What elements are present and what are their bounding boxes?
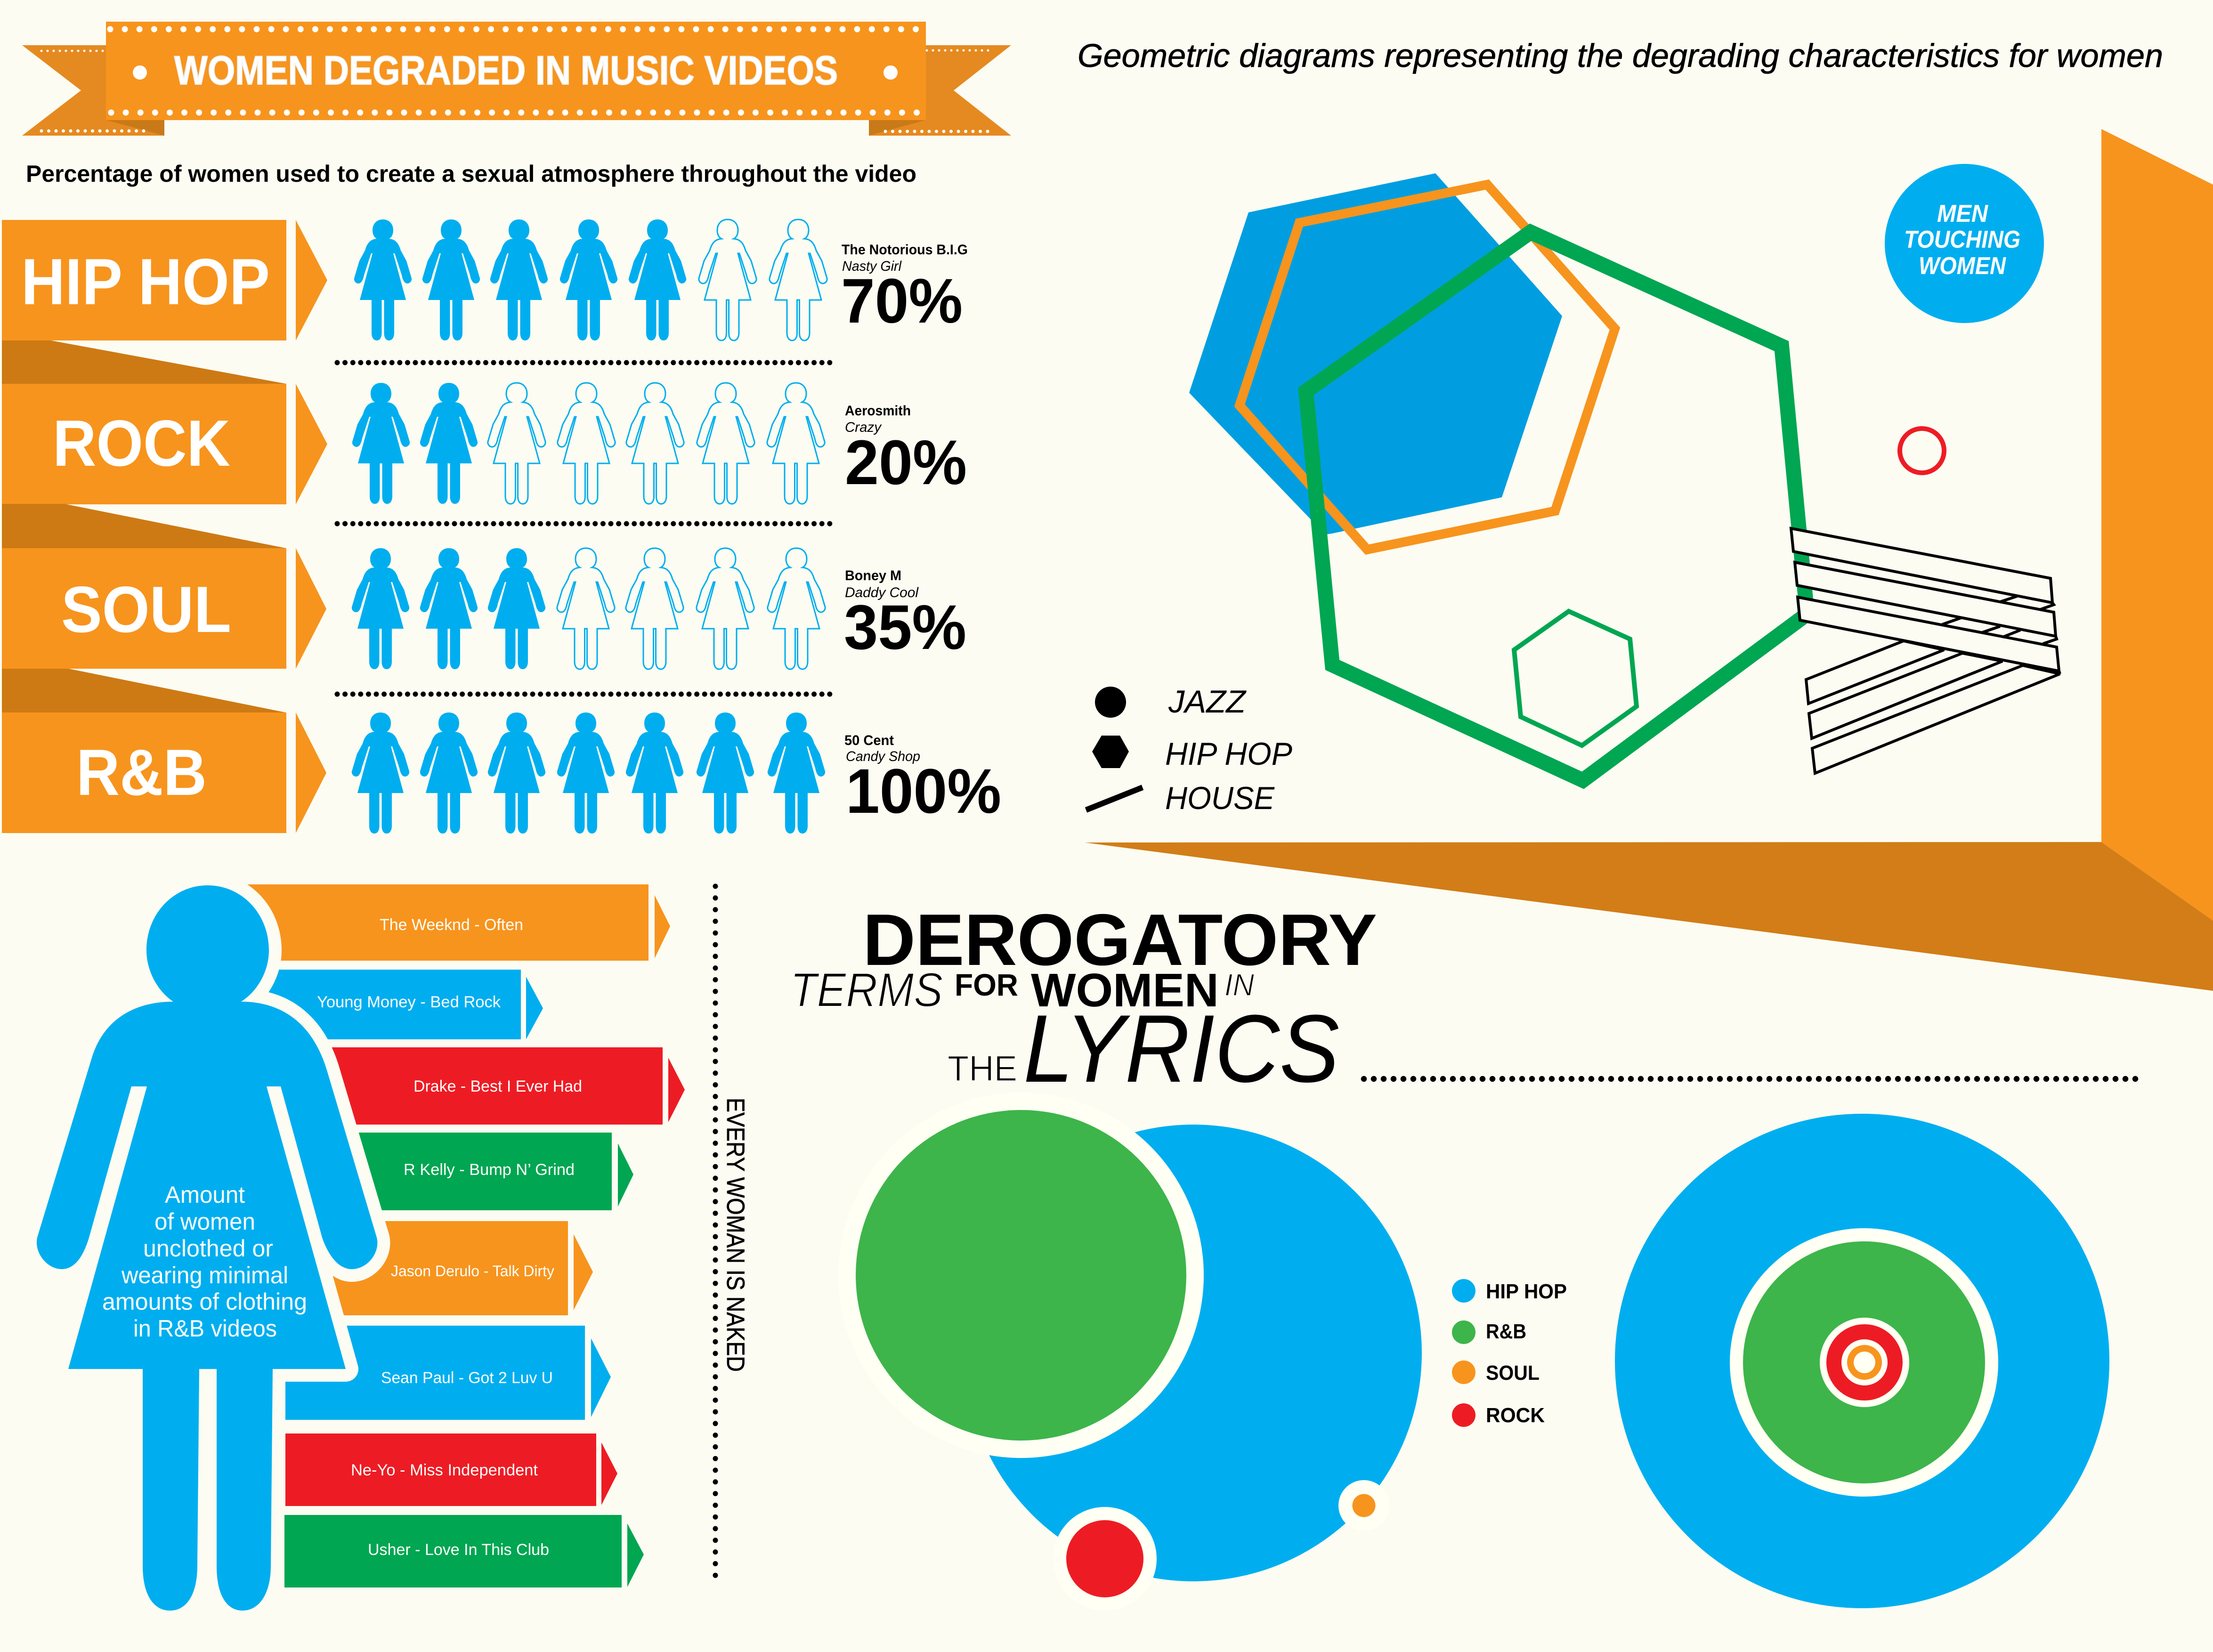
house pattern: lower parallelograms <box>1806 641 2060 773</box>
stat: soul: Boney M <box>845 568 901 583</box>
genre ribbon: soul <box>2 548 326 669</box>
figure caption: of women <box>154 1208 255 1235</box>
legend: jazz hip hop house <box>1086 684 1292 816</box>
bar: r kelly: R Kelly - Bump N’ Grind <box>404 1161 575 1179</box>
stat: r&b: 50 Cent <box>844 733 894 748</box>
pictogram row: hip hop 70% <box>354 219 827 340</box>
figure caption: Amount <box>165 1182 245 1208</box>
callout circle: men touching women: WOMEN <box>1919 252 2006 280</box>
pictogram row: soul 35% <box>352 548 825 669</box>
bar: the weeknd: The Weeknd - Often <box>380 916 523 934</box>
song bars <box>208 884 685 1587</box>
legend: genres <box>1452 1279 1567 1427</box>
legend: genres: SOUL <box>1486 1361 1540 1385</box>
stat: rock: Crazy <box>845 420 882 435</box>
legend: jazz hip hop house: HOUSE <box>1165 780 1275 816</box>
heading: derogatory terms for women in the lyrics: WOMEN <box>1031 964 1219 1017</box>
callout circle: men touching women: TOUCHING <box>1904 226 2020 253</box>
heading: derogatory terms for women in the lyrics: LYRICS <box>1023 995 1339 1102</box>
genre ribbon: soul: SOUL <box>61 573 231 646</box>
figure caption: wearing minimal <box>121 1262 288 1288</box>
ribbon fold 1 <box>2 340 286 384</box>
pictogram row: rock 20% <box>352 383 825 504</box>
bar: young money <box>254 970 543 1039</box>
callout circle: men touching women: MEN <box>1937 200 1988 227</box>
genre ribbon: r&b: R&B <box>76 736 207 809</box>
genre ribbon: r&b <box>2 713 326 833</box>
figure caption: amounts of clothing <box>102 1288 307 1315</box>
bar: sean paul: Sean Paul - Got 2 Luv U <box>381 1369 553 1387</box>
pictogram row: r&b 100% <box>352 713 825 834</box>
house pattern: upper bars <box>1791 528 2060 674</box>
figure caption: unclothed or <box>143 1235 273 1262</box>
bar: jason derulo <box>301 1221 593 1315</box>
title banner: WOMEN DEGRADED IN MUSIC VIDEOS <box>174 48 838 93</box>
legend: genres: HIP HOP <box>1486 1280 1567 1303</box>
hexagon: solid blue <box>1189 173 1562 534</box>
bar: sean paul <box>285 1326 611 1420</box>
heading: derogatory terms for women in the lyrics <box>790 899 1377 1102</box>
concentric chart <box>1615 1114 2109 1608</box>
stat: soul: Daddy Cool <box>845 585 919 600</box>
legend: jazz hip hop house: JAZZ <box>1168 684 1247 720</box>
stat: rock: 20% <box>845 428 967 498</box>
ribbon fold 3 <box>2 669 286 713</box>
stat: hip hop: The Notorious B.I.G <box>842 242 968 258</box>
circle: soul <box>1353 1494 1375 1517</box>
3d wall: orange side <box>2101 129 2213 921</box>
stat: soul: 35% <box>844 592 966 663</box>
heading: geometric diagrams: Geometric diagrams representing the degrading characteristics for women <box>1078 37 2163 74</box>
bar: ne-yo: Ne-Yo - Miss Independent <box>351 1461 538 1479</box>
venn chart <box>838 1093 1422 1611</box>
genre ribbon: hip hop <box>2 220 327 340</box>
stat: hip hop: Nasty Girl <box>842 259 902 274</box>
bar: r kelly <box>320 1133 633 1210</box>
callout circle: men touching women <box>1885 164 2044 323</box>
figure caption <box>102 1182 307 1342</box>
subtitle: percentage of women: Percentage of women used to create a sexual atmosphere throughout the video <box>26 161 916 187</box>
diagram: jazz hip hop house geometry <box>1189 173 2060 780</box>
bar: drake <box>297 1047 685 1125</box>
bar: jason derulo: Jason Derulo - Talk Dirty <box>391 1263 554 1279</box>
genre ribbon: hip hop: HIP HOP <box>21 245 270 318</box>
stat: r&b: 100% <box>846 756 1001 826</box>
stat: rock: Aerosmith <box>845 403 911 419</box>
bar: the weeknd <box>208 884 670 961</box>
legend: jazz hip hop house: HIP HOP <box>1165 736 1292 772</box>
heading: derogatory terms for women in the lyrics: FOR <box>955 967 1018 1002</box>
circle: r&b <box>856 1110 1186 1441</box>
figure caption: in R&B videos <box>133 1315 277 1342</box>
legend: genres: R&B <box>1486 1320 1526 1343</box>
hexagon: small green outline <box>1514 611 1637 745</box>
hexagon: large green outline <box>1306 232 1807 780</box>
bar: usher <box>284 1515 644 1587</box>
legend: genres: ROCK <box>1486 1404 1545 1427</box>
stat: hip hop: 70% <box>841 266 963 336</box>
heading: derogatory terms for women in the lyrics: DEROGATORY <box>863 899 1377 980</box>
ribbon fold 2 <box>2 504 286 548</box>
bar: young money: Young Money - Bed Rock <box>317 993 501 1011</box>
bar: ne-yo <box>285 1433 617 1506</box>
3d wall: dark floor <box>1085 842 2213 991</box>
red ring <box>1900 429 1944 473</box>
genre ribbon: rock <box>2 384 327 504</box>
stat: r&b: Candy Shop <box>846 749 920 764</box>
title banner <box>22 22 1011 136</box>
bar: usher: Usher - Love In This Club <box>368 1541 549 1559</box>
circle: rock <box>1066 1520 1143 1597</box>
large woman figure <box>37 885 377 1611</box>
heading: derogatory terms for women in the lyrics: IN <box>1224 967 1254 1002</box>
bar: drake: Drake - Best I Ever Had <box>413 1077 582 1095</box>
genre ribbon: rock: ROCK <box>53 407 230 480</box>
heading: derogatory terms for women in the lyrics: THE <box>948 1049 1017 1089</box>
vertical label: every woman is naked: EVERY WOMAN IS NAKED <box>721 1098 749 1372</box>
hexagon: orange outline <box>1240 185 1615 550</box>
heading: derogatory terms for women in the lyrics: TERMS <box>790 963 943 1017</box>
